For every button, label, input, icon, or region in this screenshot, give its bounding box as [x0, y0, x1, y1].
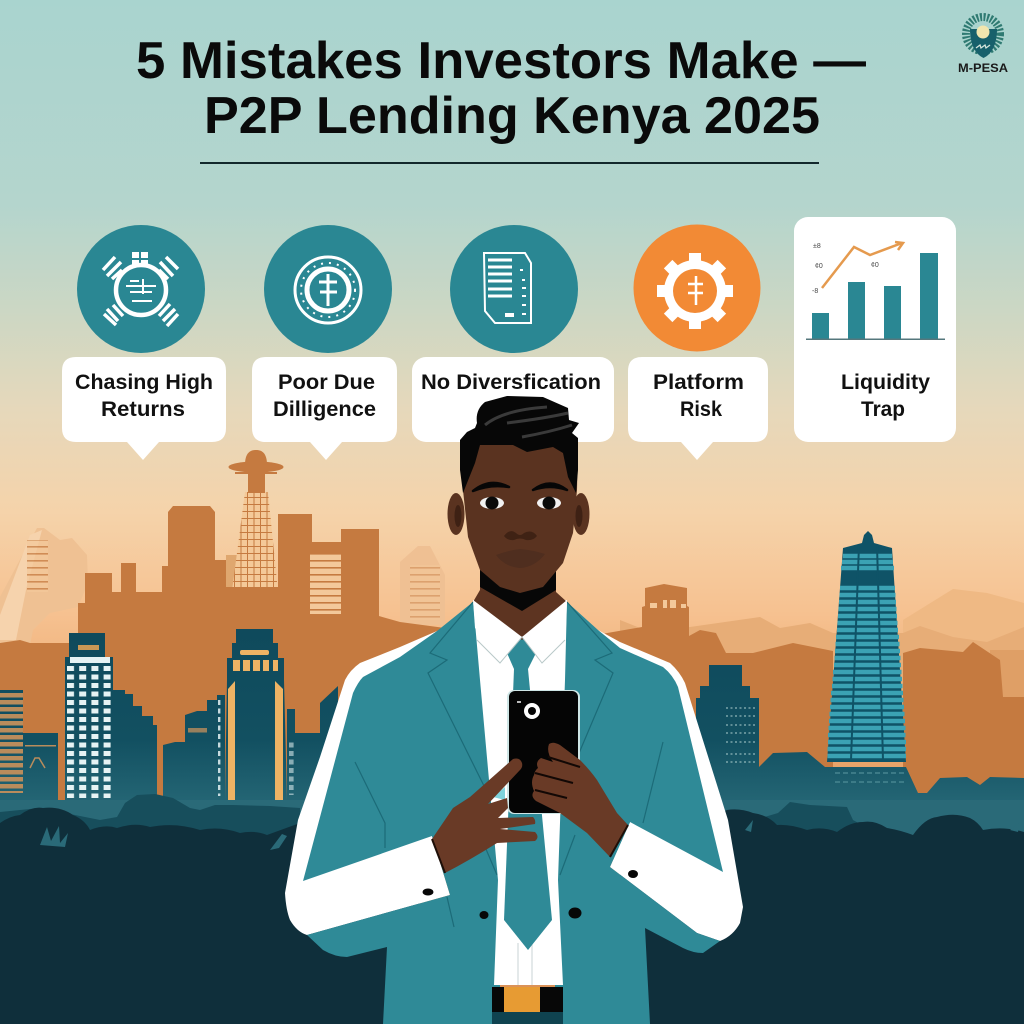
text bubble: platform risk: Platform — [653, 371, 744, 394]
title: 5 Mistakes Investors Make — — [136, 32, 866, 90]
shirt — [473, 600, 567, 985]
icon: chasing high returns — [77, 225, 205, 353]
belt — [492, 987, 563, 1024]
blue striped skyscraper — [827, 531, 906, 762]
teal jacket — [303, 602, 723, 1024]
bar chart: ¢0 — [871, 262, 879, 269]
text bubble: chasing high returns — [62, 357, 226, 460]
foreground dark forest — [0, 808, 1024, 1024]
orange skyline right with forest — [590, 584, 1024, 800]
text bubble: poor due diligence: Poor Due — [278, 371, 375, 394]
neck and collar — [473, 560, 567, 663]
icon: no diversification document — [450, 225, 578, 353]
nose — [504, 531, 537, 540]
buttons — [422, 870, 638, 919]
mid tree line — [0, 794, 1024, 860]
text bubble: poor due diligence: Dilligence — [273, 398, 376, 421]
right hand — [532, 743, 628, 857]
card: liquidity trap chart: Trap — [861, 398, 905, 421]
mouth — [496, 549, 545, 568]
left hand — [432, 758, 538, 873]
figure: investor holding phone — [285, 396, 743, 1024]
white-window tower — [65, 633, 113, 800]
logo: M-PESA emblem — [958, 17, 1008, 75]
bar chart — [806, 242, 945, 340]
shirt fly — [518, 943, 532, 985]
ears — [448, 493, 590, 535]
distant mountains — [0, 528, 1024, 700]
eyebrows — [473, 483, 567, 491]
text bubble: chasing high returns: Returns — [101, 398, 185, 421]
icon: platform risk gear — [634, 224, 760, 352]
teal building group left — [0, 686, 338, 803]
orange city skyline left — [0, 506, 460, 900]
bar chart: -8 — [812, 288, 818, 295]
text bubble: chasing high returns: Chasing High — [75, 371, 213, 394]
bar chart: ¢0 — [815, 263, 823, 270]
text bubble: platform risk: Risk — [680, 398, 722, 421]
icon: poor due diligence — [264, 225, 392, 353]
text bubble: no diversification: No Diversfication — [421, 371, 601, 394]
title — [136, 32, 866, 145]
tie — [504, 637, 552, 950]
logo: M-PESA emblem: M-PESA — [958, 61, 1008, 75]
eyes — [480, 496, 561, 510]
white sleeves and shoulder rim — [285, 630, 743, 941]
text bubble: poor due diligence — [252, 357, 397, 460]
bar chart: ±8 — [813, 243, 821, 250]
hair — [460, 396, 579, 493]
jacket seams and lapels — [355, 602, 663, 927]
landmark tower: KICC — [228, 450, 284, 587]
title: P2P Lending Kenya 2025 — [204, 87, 820, 145]
card: liquidity trap chart — [794, 217, 956, 442]
face — [460, 396, 579, 593]
teal buildings and band right — [696, 665, 1024, 850]
hair highlights — [485, 407, 572, 437]
amber-window tower — [225, 629, 287, 800]
phone — [507, 690, 580, 814]
text bubble: no diversification — [412, 357, 614, 442]
text bubble: platform risk — [628, 357, 768, 460]
card: liquidity trap chart: Liquidity — [841, 371, 930, 394]
